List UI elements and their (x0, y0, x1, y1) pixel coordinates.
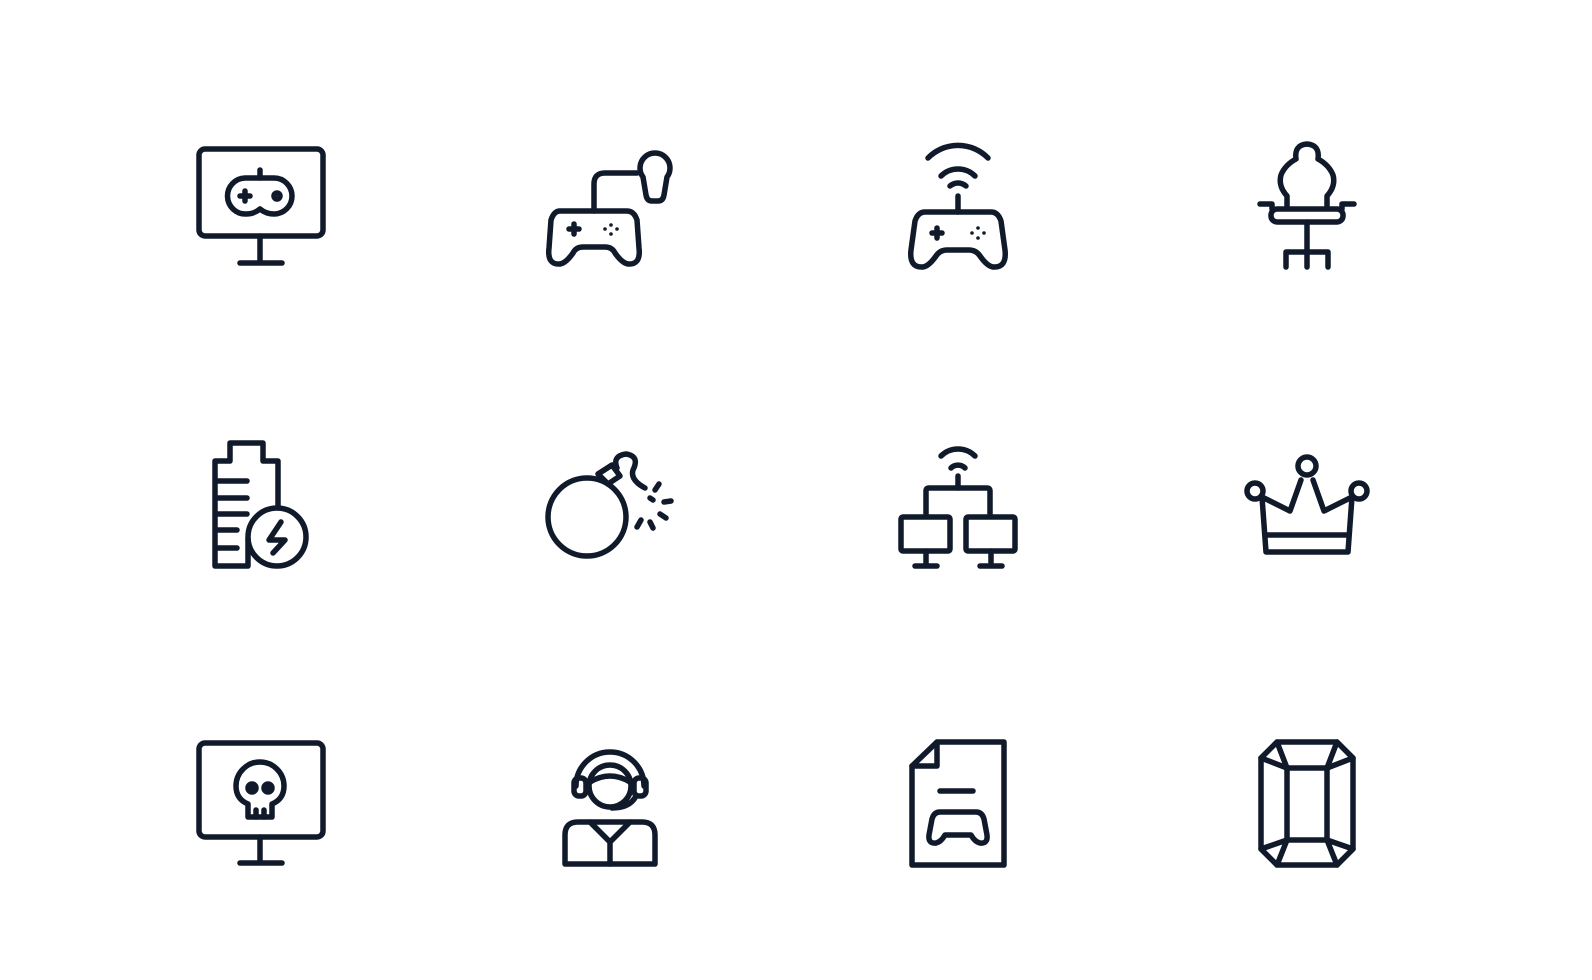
icon: game file document (912, 742, 1004, 865)
icon: gaming chair (1260, 144, 1354, 267)
icon: crown (1247, 457, 1367, 552)
icon: monitor with skull (199, 743, 323, 863)
icon: wireless controller (911, 145, 1005, 267)
icon: battery building with bolt (215, 443, 306, 566)
icon: gem (1261, 742, 1353, 865)
icon: bomb (548, 454, 671, 556)
icon: gamer with headset (565, 752, 655, 864)
icon: network with wifi (901, 449, 1015, 566)
icon: monitor with gamepad (199, 149, 323, 263)
icon: controller with lightbulb (549, 153, 670, 264)
